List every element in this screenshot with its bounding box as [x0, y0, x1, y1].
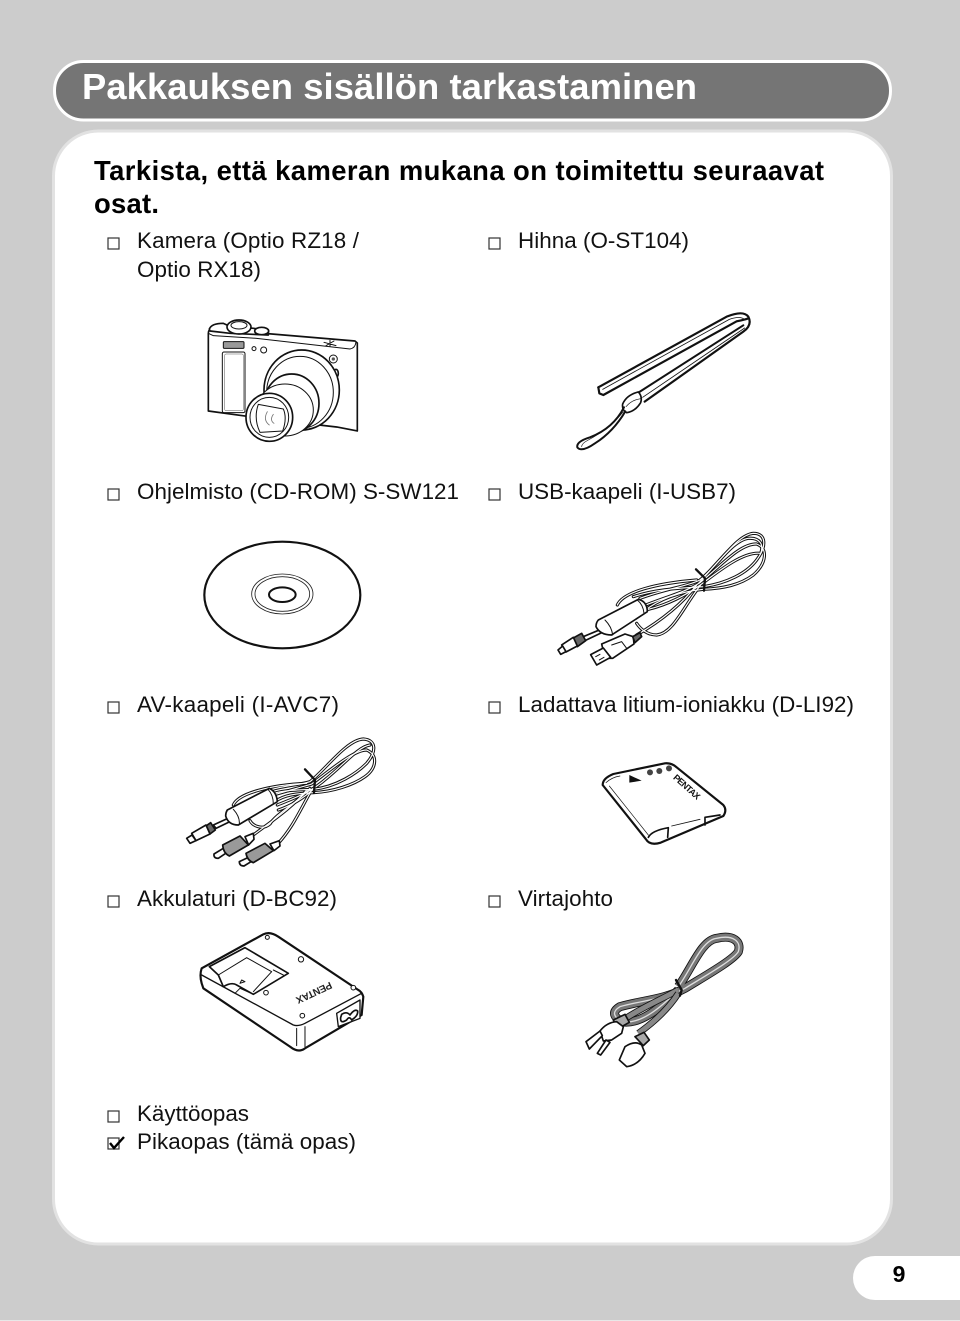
intro text — [94, 155, 824, 219]
page number tab — [853, 1256, 960, 1300]
item: manual label: Käyttöopas — [137, 1101, 249, 1126]
item: charger label: Akkulaturi (D-BC92) — [137, 886, 337, 911]
icon: AV cable — [187, 739, 375, 866]
icon: charger — [200, 933, 363, 1050]
item: strap label: Hihna (O-ST104) — [518, 228, 689, 253]
page number tab: 9 — [893, 1261, 905, 1287]
title bar: Pakkauksen sisällön tarkastaminen — [82, 66, 697, 107]
icon: camera — [208, 320, 357, 441]
icon: strap — [577, 313, 750, 449]
item: USB cable label: USB-kaapeli (I-USB7) — [518, 479, 736, 504]
item: camera label: Optio RX18) — [137, 257, 261, 282]
item: quick guide label with check: Pikaopas (tämä opas) — [137, 1129, 356, 1154]
panel: package contents — [54, 131, 892, 1244]
item: camera label: Kamera (Optio RZ18 / — [137, 228, 360, 253]
icon: battery: PENTAX — [671, 772, 702, 802]
item: power cord label: Virtajohto — [518, 886, 613, 911]
intro text: Tarkista, että kameran mukana on toimitettu seuraavat — [94, 155, 824, 186]
item: battery label: Ladattava litium-ioniakku (D-LI92) — [518, 692, 854, 717]
title bar — [54, 62, 890, 120]
item: camera label — [108, 228, 360, 282]
intro text: osat. — [94, 188, 159, 219]
item: software label: Ohjelmisto (CD-ROM) S-SW121 — [137, 479, 459, 504]
icon: CD-ROM — [204, 542, 360, 648]
icon: charger: PENTAX — [294, 979, 333, 1005]
item: AV cable label: AV-kaapeli (I-AVC7) — [137, 692, 339, 717]
icon: power cord — [586, 937, 739, 1067]
icon: USB cable — [558, 533, 764, 665]
icon: battery — [603, 763, 725, 844]
